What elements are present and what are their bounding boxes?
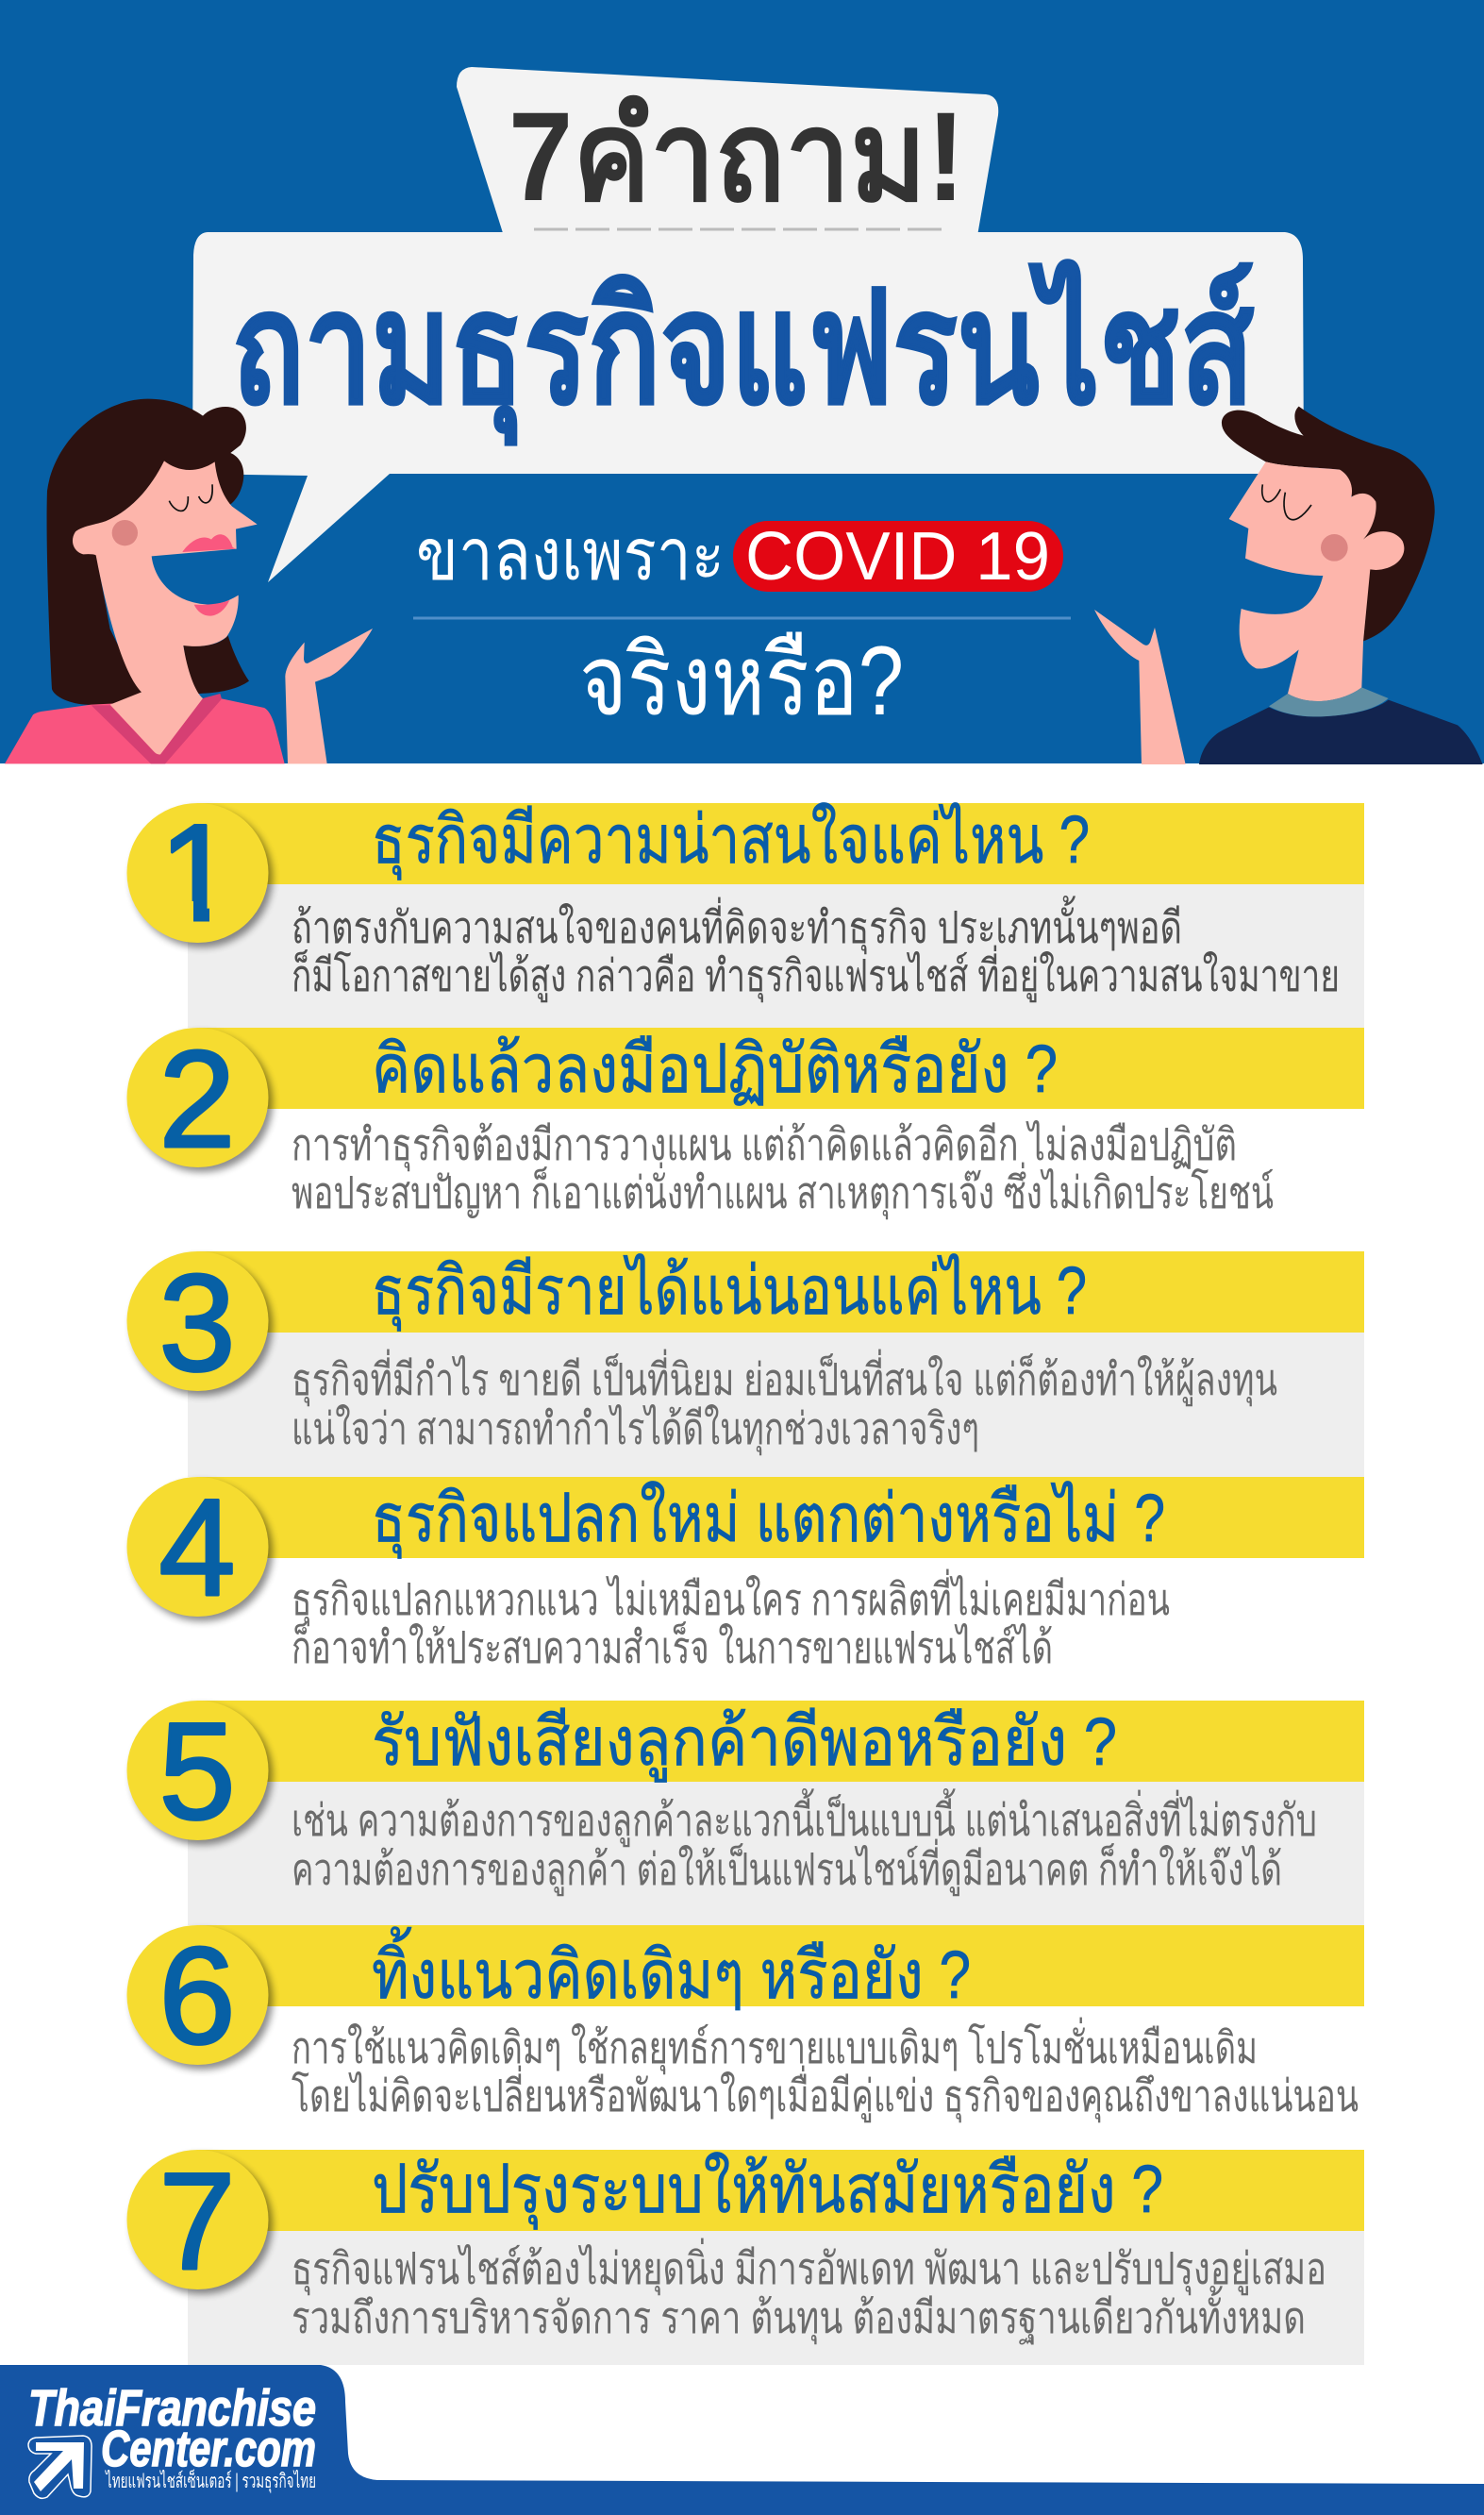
item 2 bbox=[126, 1022, 1364, 1220]
logo wordmark: ThaiFranchise bbox=[28, 2380, 316, 2437]
item 4: ธุรกิจแปลกใหม่ แตกต่างหรือไม่ ? bbox=[372, 1480, 1165, 1559]
icon: logo arrow bbox=[28, 2436, 92, 2498]
item 3: แน่ใจว่า สามารถทำกำไรได้ดีในทุกช่วงเวลาจริงๆ bbox=[292, 1403, 979, 1456]
title line 1: 7คำถาม! bbox=[509, 87, 965, 227]
footer logo panel: Center.com bbox=[101, 2421, 316, 2477]
speech bubble: upper tab bbox=[457, 67, 998, 236]
item 4: ธุรกิจแปลกแหวกแนว ไม่เหมือนใคร การผลิตที่ไม่เคยมีมาก่อน bbox=[292, 1568, 1170, 1627]
character: man bbox=[1094, 407, 1483, 764]
item 5 bbox=[126, 1694, 1364, 1925]
item 6: ทิ้งแนวคิดเดิมๆ หรือยัง ? bbox=[372, 1926, 971, 2013]
item 5: รับฟังเสียงลูกค้าดีพอหรือยัง ? bbox=[372, 1705, 1117, 1783]
item 3: 3 bbox=[158, 1246, 236, 1400]
item 7 bbox=[126, 2144, 1364, 2365]
item 4 bbox=[126, 1470, 1364, 1672]
logo tagline: ไทยแฟรนไชส์เซ็นเตอร์ | รวมธุรกิจไทย bbox=[105, 2468, 316, 2493]
item 1: 1 bbox=[158, 796, 236, 949]
item 2: การทำธุรกิจต้องมีการวางแผน แต่ถ้าคิดแล้วคิดอีก ไม่ลงมือปฏิบัติ bbox=[292, 1119, 1237, 1172]
header banner bbox=[0, 0, 1484, 764]
subtitle bottom: จริงหรือ? bbox=[579, 627, 904, 736]
item 2: คิดแล้วลงมือปฏิบัติหรือยัง ? bbox=[372, 1032, 1058, 1107]
item 4: ก็อาจทำให้ประสบความสำเร็จ ในการขายแฟรนไชส์ได้ bbox=[292, 1620, 1053, 1672]
speech bubble: main bbox=[192, 232, 1304, 582]
item 2: 2 bbox=[158, 1022, 236, 1176]
dashed divider bbox=[534, 228, 942, 230]
item 3 bbox=[126, 1246, 1364, 1477]
footer logo panel bbox=[0, 2365, 1484, 2515]
item 7: ปรับปรุงระบบให้ทันสมัยหรือยัง ? bbox=[372, 2152, 1163, 2230]
subtitle left: ขาลงเพราะ bbox=[416, 515, 725, 595]
item 7: 7 bbox=[158, 2144, 236, 2298]
item 1 bbox=[126, 796, 1364, 1028]
item 4: 4 bbox=[158, 1470, 236, 1624]
character: woman bbox=[5, 399, 373, 763]
item 6 bbox=[126, 1919, 1364, 2123]
covid pill: COVID 19 bbox=[745, 519, 1050, 595]
item 6: 6 bbox=[158, 1919, 236, 2072]
item 5: 5 bbox=[158, 1694, 236, 1848]
item 3: ธุรกิจมีรายได้แน่นอนแค่ไหน ? bbox=[372, 1252, 1087, 1332]
item 1: ธุรกิจมีความน่าสนใจแค่ไหน ? bbox=[372, 801, 1090, 880]
item 1: ถ้าตรงกับความสนใจของคนที่คิดจะทำธุรกิจ ประเภทนั้นๆพอดี bbox=[292, 896, 1182, 955]
